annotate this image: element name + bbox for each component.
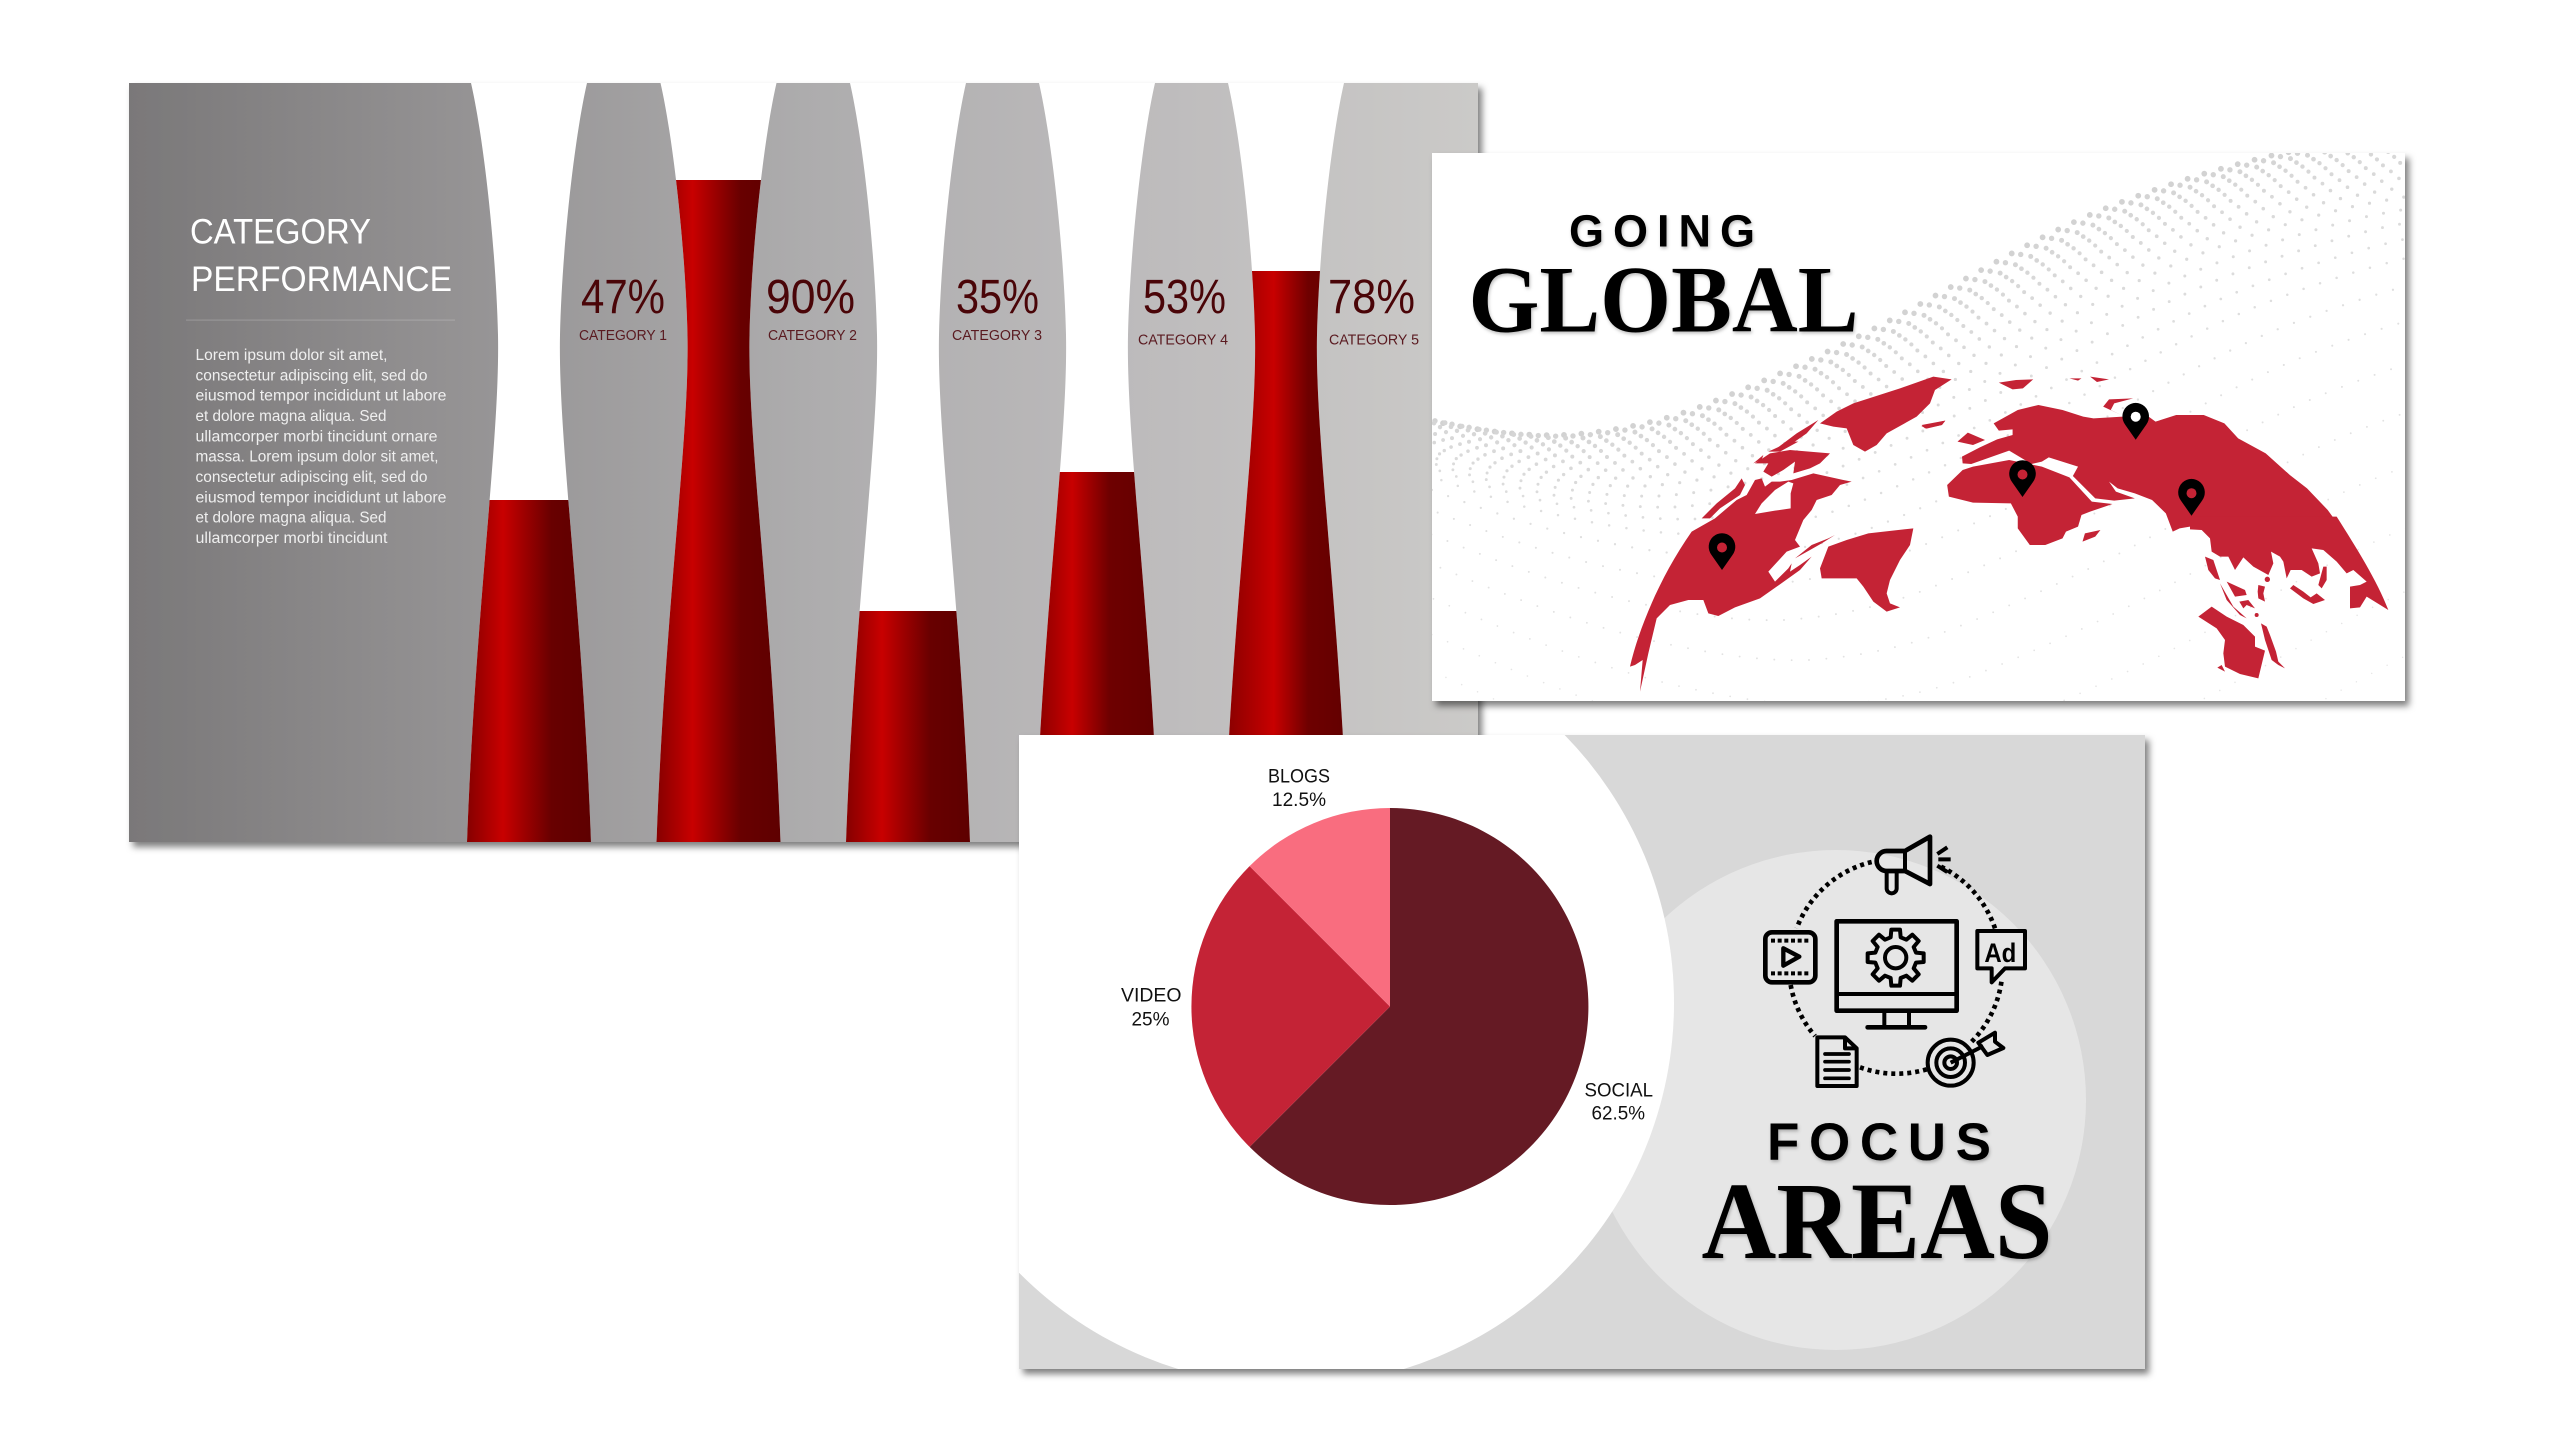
panel background (129, 83, 1478, 842)
label: category 1 47%: 47% (581, 271, 665, 324)
icon: map pin asia (2178, 479, 2205, 516)
body text (196, 347, 446, 547)
map: southeast asia and australia (2190, 517, 2388, 678)
dotted ring (1791, 862, 2002, 1074)
map: europe, africa, asia (1921, 377, 2340, 545)
label: blogs (1268, 766, 1330, 811)
body text: eiusmod tempor incididunt ut labore (196, 388, 446, 405)
label: category 5 78%: CATEGORY 5 (1329, 332, 1419, 348)
world map (1630, 377, 2388, 692)
vase column 5 with bar (1228, 83, 1344, 735)
label: category 1 47% (579, 271, 667, 344)
dotted wave background (1432, 153, 2405, 701)
pie chart (1191, 808, 1588, 1205)
label: category 3 35%: 35% (956, 271, 1039, 324)
label: video: 25% (1132, 1008, 1170, 1030)
icon: ad speech bubble (1977, 931, 2025, 982)
slice: social 62.5% (1250, 808, 1588, 1205)
panel: going global (1432, 153, 2414, 711)
icon: map pin russia (2122, 403, 2149, 440)
label: category 2 90%: 90% (766, 271, 855, 324)
heading: category performance (190, 212, 452, 299)
label: category 3 35% (952, 271, 1042, 344)
panel: category performance (129, 83, 1478, 843)
label: category 5 78%: 78% (1328, 271, 1415, 324)
label: category 2 90% (766, 271, 857, 344)
vase column 1 with bar (467, 83, 591, 842)
slice: blogs 12.5% (1250, 808, 1390, 1006)
icon: map pin america (1709, 533, 1735, 570)
label: category 2 90%: CATEGORY 2 (768, 327, 857, 344)
icon: video player (1765, 932, 1815, 982)
heading: going global: GLOBAL (1468, 246, 1858, 352)
label: video: VIDEO (1121, 984, 1182, 1006)
body text: massa. Lorem ipsum dolor sit amet, (196, 449, 438, 466)
white circle (1019, 735, 1674, 1369)
label: category 5 78% (1328, 271, 1419, 348)
vase column 2 with bar (656, 83, 780, 842)
label: category 4 53% (1138, 271, 1228, 348)
body text: ullamcorper morbi tincidunt ornare (196, 428, 438, 445)
vase column 4 with bar (1039, 83, 1155, 735)
vase column 3 with bar (846, 83, 970, 842)
icon: ad speech bubble: Ad (1984, 938, 2016, 968)
body text: et dolore magna aliqua. Sed (196, 408, 386, 425)
heading: category performance: CATEGORY (190, 212, 371, 252)
heading: focus areas: AREAS (1702, 1160, 2052, 1282)
label: category 1 47%: CATEGORY 1 (579, 327, 667, 344)
body text: eiusmod tempor incididunt ut labore (196, 489, 446, 506)
label: social: SOCIAL (1584, 1080, 1653, 1102)
icon: map pin africa (2009, 460, 2036, 497)
body text: consectetur adipiscing elit, sed do (196, 367, 428, 384)
label: blogs: BLOGS (1268, 766, 1330, 788)
panel background (1432, 153, 2405, 701)
map: americas (1630, 377, 1952, 692)
light circle (1586, 850, 2086, 1350)
body text: ullamcorper morbi tincidunt (196, 530, 388, 547)
label: social: 62.5% (1592, 1102, 1645, 1124)
label: category 4 53%: 53% (1143, 271, 1226, 324)
icon: target with arrow (1928, 1033, 2003, 1086)
icon: megaphone (1877, 837, 1951, 893)
icon: digital marketing cycle (1765, 837, 2025, 1086)
body text: et dolore magna aliqua. Sed (196, 510, 386, 527)
icon: document (1817, 1037, 1857, 1086)
icon: monitor with gear (1837, 921, 1957, 1027)
label: category 4 53%: CATEGORY 4 (1138, 332, 1228, 348)
heading: focus areas: FOCUS (1767, 1113, 1991, 1172)
label: category 3 35%: CATEGORY 3 (952, 327, 1042, 344)
label: blogs: 12.5% (1272, 789, 1326, 811)
slice: video 25% (1191, 866, 1390, 1147)
label: social (1584, 1080, 1653, 1124)
heading: category performance: PERFORMANCE (191, 260, 452, 299)
body text: Lorem ipsum dolor sit amet, (196, 347, 388, 364)
heading: going global: GOING (1569, 206, 1755, 256)
label: video (1121, 984, 1182, 1030)
heading: focus areas (1702, 1113, 2052, 1282)
panel background (1019, 735, 2145, 1369)
body text: consectetur adipiscing elit, sed do (196, 469, 428, 486)
panel: focus areas (1018, 735, 2154, 1379)
heading: going global (1468, 206, 1858, 352)
